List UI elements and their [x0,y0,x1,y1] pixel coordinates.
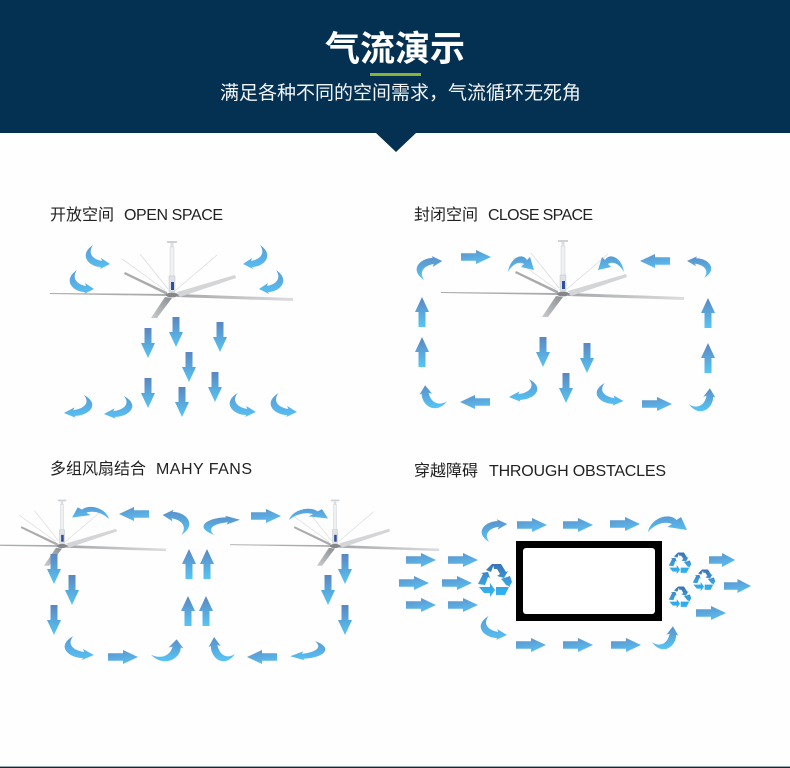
title: 气流演示 [325,30,465,69]
heading: open space: OPEN SPACE [124,207,223,224]
subtitle: 满足各种不同的空间需求，气流循环无死角 [220,82,581,104]
heading: many fans: MAHY FANS [156,461,252,478]
green accent bar [370,73,421,76]
straight airflow arrows [415,250,715,411]
heading: open space [50,206,223,224]
heading: through obstacles [414,462,666,480]
curved airflow arrows [481,516,687,649]
header pointer triangle [376,133,416,152]
panel: many fans [0,460,439,664]
left fan illustration [0,500,166,566]
obstacle frame [516,541,662,621]
curved airflow arrows [64,245,297,419]
straight airflow arrows [47,507,352,664]
fan illustration [441,240,684,317]
right fan illustration [230,500,439,566]
fan illustration [50,241,293,318]
bottom edge line [0,767,790,768]
heading: through obstacles: THROUGH OBSTACLES [489,463,666,480]
heading: open space: 开放空间 [50,206,114,224]
outgoing airflow arrows [696,553,751,620]
panel: through obstacles [399,462,751,652]
curved airflow arrows [417,256,715,411]
recycle icon: large [478,564,512,597]
heading: through obstacles: 穿越障碍 [414,462,478,480]
airflow above and below obstacle [516,517,641,652]
curved airflow arrows [65,507,328,661]
header band [0,0,790,152]
recycle icons: small [669,552,715,608]
panel: close space [414,206,715,411]
heading: close space: 封闭空间 [414,206,478,224]
incoming airflow arrows [399,553,478,612]
heading: many fans [50,460,252,478]
panel: open space [50,206,297,419]
heading: close space [414,206,593,224]
downward airflow arrows [141,317,227,417]
heading: close space: CLOSE SPACE [488,207,593,224]
heading: many fans: 多组风扇结合 [50,460,146,478]
